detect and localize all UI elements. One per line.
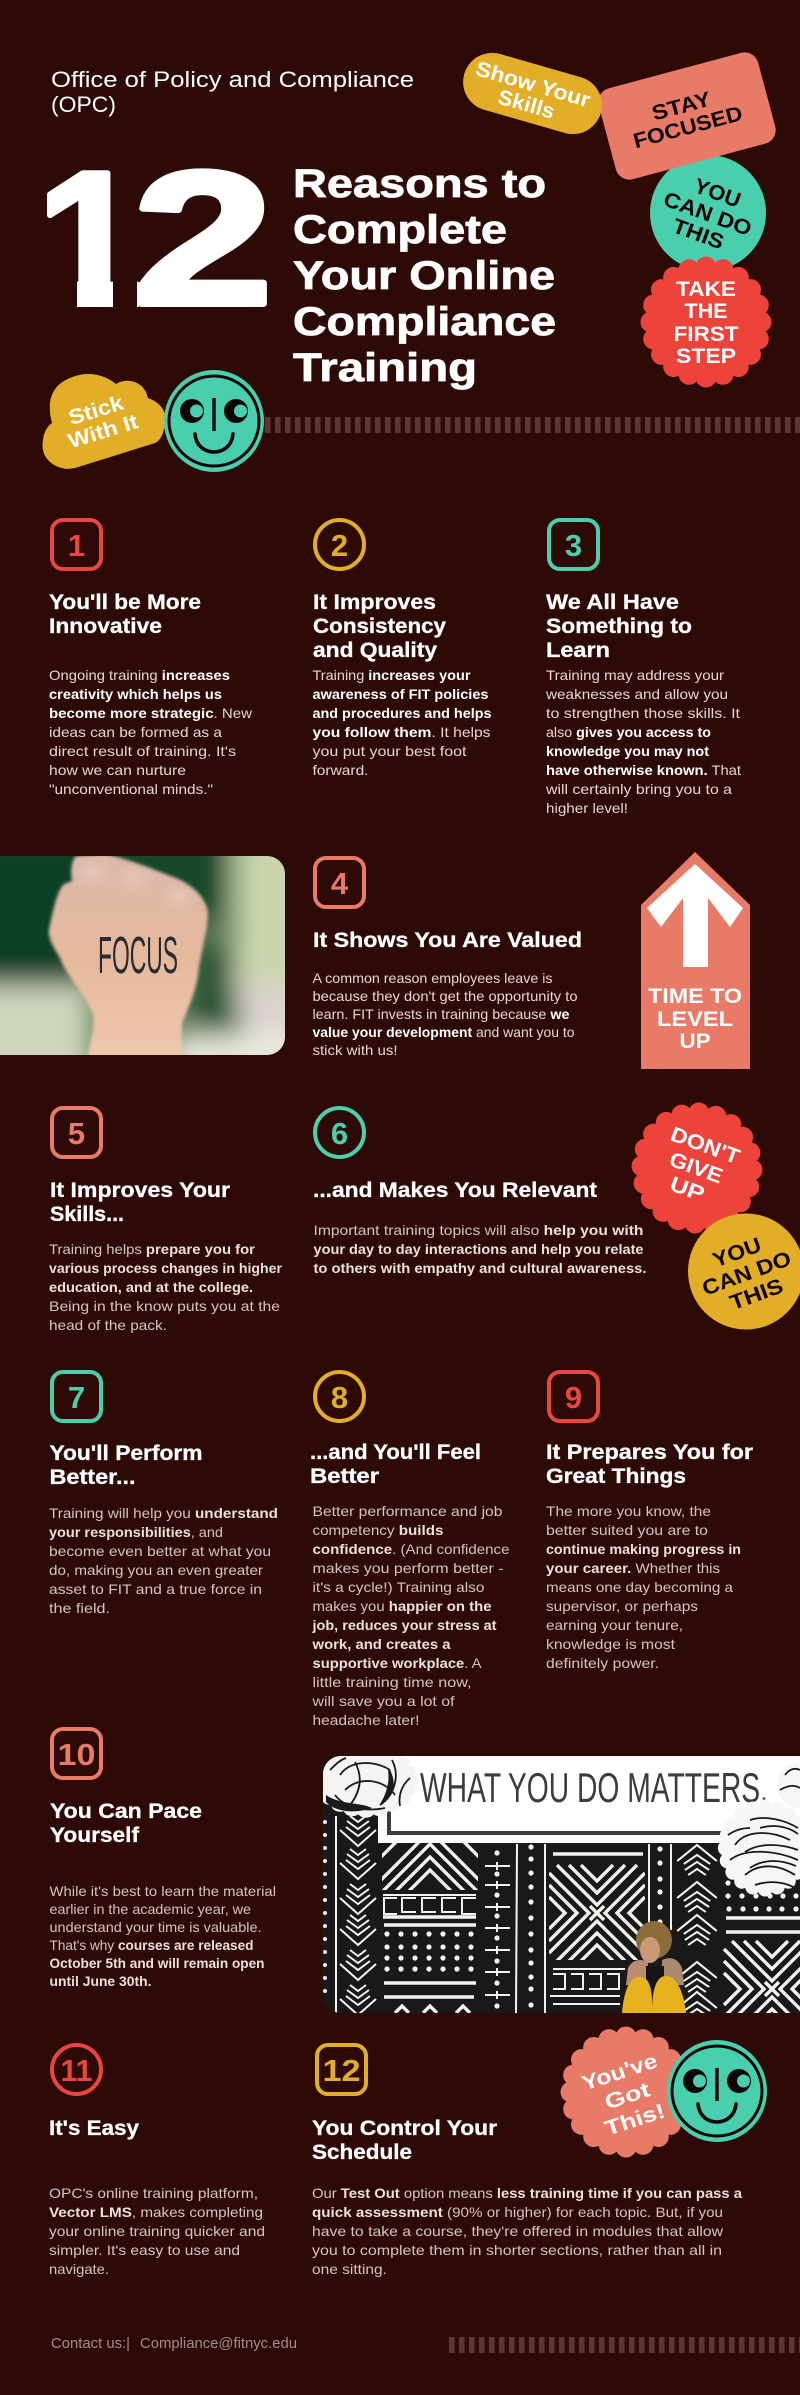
icon: smiley face bottom [667, 2040, 767, 2142]
sticker: stick with it: Stick [66, 391, 127, 430]
reason 4 [312, 858, 582, 1058]
big number 12: 2 [133, 133, 273, 345]
body 2 [312, 667, 492, 778]
reason 11 [49, 2045, 265, 2277]
sticker: show your skills: Show Your [473, 57, 593, 112]
main title: Training [293, 346, 477, 390]
reason 5 [49, 1108, 283, 1333]
reason 2 [312, 520, 492, 778]
number badge 6: 6 [331, 1116, 348, 1151]
body 12: quick assessment (90% or higher) for each topic. But, if you [312, 2204, 723, 2220]
body 7: the field. [49, 1600, 110, 1616]
sticker: you can do this (gold): THIS [727, 1275, 786, 1315]
body 3: weaknesses and allow you [545, 686, 728, 702]
number badge 8 [315, 1372, 364, 1421]
footer contact: Contact us:| [51, 2335, 130, 2352]
body 10: October 5th and will remain open [50, 1955, 264, 1971]
body 7: become even better at what you [49, 1543, 271, 1559]
body 8: it's a cycle!) Training also [312, 1579, 485, 1595]
body 9: better suited you are to [546, 1522, 708, 1538]
number badge 9 [549, 1372, 598, 1421]
body 10: While it's best to learn the material [50, 1883, 276, 1899]
body 3 [545, 667, 741, 816]
heading 3 [546, 591, 692, 662]
sticker: take the first step: TAKE [676, 278, 736, 301]
heading 10: You Can Pace [50, 1800, 202, 1823]
big number 12: 1 [37, 133, 143, 345]
divider stripes: header [265, 417, 800, 433]
body 7: asset to FIT and a true force in [49, 1581, 262, 1597]
body 5: head of the pack. [49, 1317, 167, 1333]
sticker: you've got this: Got [602, 2078, 653, 2114]
body 2: awareness of FIT policies [312, 686, 489, 702]
body 3: have otherwise known. That [546, 762, 741, 778]
body 8 [311, 1503, 510, 1728]
sticker: take the first step: FIRST [674, 323, 739, 346]
sticker: you've got this: You've [579, 2050, 660, 2095]
body 11: Vector LMS , makes completing [49, 2204, 263, 2220]
heading 5: Skills... [50, 1203, 124, 1226]
body 1: Ongoing training increases [49, 667, 230, 683]
body 12 [312, 2185, 742, 2277]
number badge 12 [317, 2045, 366, 2094]
body 9: earning your tenure, [546, 1617, 683, 1633]
body 4: because they don't get the opportunity to [312, 988, 578, 1004]
number badge 2 [315, 520, 364, 569]
sticker: don't give up [613, 1084, 781, 1252]
icon: smiley face top [164, 370, 264, 472]
heading 3: Learn [546, 639, 610, 662]
number badge 6 [315, 1108, 364, 1157]
reason 8 [310, 1372, 510, 1728]
body 10: earlier in the academic year, we [50, 1901, 251, 1917]
heading 12: You Control Your [312, 2117, 497, 2140]
body 11 [49, 2185, 265, 2277]
body 5: various process changes in higher [49, 1260, 283, 1276]
sticker: you've got this: This! [602, 2100, 668, 2141]
body 8: work, and creates a [311, 1636, 451, 1652]
body 12: Our Test Out option means less training time if you can pass a [312, 2185, 742, 2201]
body 2: forward. [312, 762, 368, 778]
icon: white up arrow [647, 864, 743, 967]
sticker: take the first step [640, 256, 772, 388]
sticker: don't give up: GIVE [666, 1148, 726, 1188]
mural banner [378, 1756, 800, 1843]
heading 10: Yourself [50, 1824, 140, 1847]
body 8: Better performance and job [312, 1503, 503, 1519]
organisation name: Office of Policy and Compliance [51, 67, 414, 92]
body 7: Training will help you understand [49, 1505, 278, 1521]
main title: Complete [293, 208, 507, 252]
heading 10 [50, 1800, 202, 1847]
sticker: you can do this (green): THIS [669, 215, 727, 254]
photo: focus tattoo on fist: FOCUS [98, 927, 178, 985]
body 6: Important training topics will also help you with [314, 1222, 644, 1238]
main title [293, 162, 556, 390]
body 8: supportive workplace . A [312, 1655, 482, 1671]
body 3: also gives you access to [546, 724, 711, 740]
number badge 3: 3 [565, 528, 582, 563]
body 9: your career. Whether this [546, 1560, 720, 1576]
sticker: show your skills [456, 46, 609, 141]
body 5 [49, 1241, 283, 1333]
heading 5 [50, 1179, 230, 1226]
heading 7: You'll Perform [50, 1442, 202, 1465]
sticker: take the first step: THE [684, 300, 728, 323]
body 1: how we can nurture [49, 762, 186, 778]
photo: focus tattoo on fist [0, 856, 285, 1055]
body 8: makes you perform better - [312, 1560, 504, 1576]
sticker: you can do this (green) [650, 155, 766, 271]
heading 4: It Shows You Are Valued [313, 929, 582, 952]
body 11: navigate. [49, 2261, 109, 2277]
sticker: you can do this (green): CAN DO [660, 188, 755, 241]
body 5: education, and at the college. [49, 1279, 253, 1295]
heading 3: Something to [546, 615, 692, 638]
body 11: your online training quicker and [49, 2223, 265, 2239]
body 9 [546, 1503, 741, 1671]
heading 12: Schedule [312, 2141, 412, 2164]
body 7: do, making you an even greater [49, 1562, 263, 1578]
body 2: Training increases your [312, 667, 471, 683]
reason 10 [50, 1729, 276, 1989]
body 10: understand your time is valuable. [50, 1919, 262, 1935]
main title: Reasons to [293, 162, 546, 206]
number badge 3 [549, 520, 598, 569]
sticker: stick with it [42, 374, 166, 469]
body 2: you follow them . It helps [312, 724, 491, 740]
body 1 [49, 667, 253, 797]
reason 7 [49, 1372, 278, 1616]
body 4: stick with us! [312, 1042, 398, 1058]
body 12: have to take a course, they're offered in modules that allow [312, 2223, 724, 2239]
sticker: take the first step: STEP [676, 345, 736, 368]
body 1: creativity which helps us [49, 686, 222, 702]
number badge 9: 9 [565, 1380, 582, 1415]
body 3: higher level! [546, 800, 628, 816]
heading 7: Better... [50, 1466, 136, 1489]
heading 6: ...and Makes You Relevant [313, 1179, 597, 1202]
body 9: continue making progress in [546, 1541, 741, 1557]
arrow caption: UP [680, 1030, 710, 1053]
body 10: until June 30th. [50, 1973, 152, 1989]
body 1: direct result of training. It's [49, 743, 236, 759]
body 8: confidence . (And confidence [312, 1541, 510, 1557]
number badge 5 [52, 1108, 101, 1157]
heading 1: You'll be More [49, 591, 201, 614]
body 12: one sitting. [312, 2261, 387, 2277]
number badge 2: 2 [331, 528, 348, 563]
body 1: become more strategic . New [49, 705, 253, 721]
sticker: stick with it: With It [65, 410, 141, 453]
sticker: you can do this (gold) [688, 1214, 800, 1330]
woman sitting in yellow trousers [622, 1921, 686, 2013]
body 8: will save you a lot of [311, 1693, 455, 1709]
photo: what you do matters mural [323, 1756, 800, 2013]
body 8: competency builds [312, 1522, 444, 1538]
number badge 10: 10 [58, 1737, 96, 1772]
heading 8: ...and You'll Feel [310, 1441, 481, 1464]
body 3: knowledge you may not [546, 743, 709, 759]
organisation name [51, 67, 414, 117]
body 8: headache later! [312, 1712, 420, 1728]
heading 8 [310, 1441, 481, 1488]
flower left [323, 1756, 418, 1818]
main title: Your Online [293, 254, 555, 298]
reason 12 [312, 2045, 742, 2277]
sticker: don't give up: DON'T [667, 1123, 743, 1169]
reason 9 [546, 1372, 753, 1671]
body 4: learn. FIT invests in training because we [312, 1006, 570, 1022]
sticker: stay focused: FOCUSED [631, 102, 745, 153]
heading 9 [546, 1441, 753, 1488]
heading 11: It's Easy [49, 2117, 139, 2140]
arrow caption [648, 985, 742, 1053]
reason 1 [49, 520, 253, 797]
body 10 [50, 1883, 276, 1989]
body 8: little training time now, [312, 1674, 472, 1690]
body 8: makes you happier on the [312, 1598, 492, 1614]
big number 12 [25, 133, 273, 345]
body 4: value your development and want you to [312, 1024, 575, 1040]
body 7 [49, 1505, 278, 1616]
body 2: you put your best foot [312, 743, 467, 759]
sticker: stay focused [595, 49, 779, 183]
heading 2: Consistency [313, 615, 446, 638]
sticker: you can do this (green): YOU [691, 174, 744, 212]
arrow caption: TIME TO [648, 985, 742, 1008]
body 9: means one day becoming a [546, 1579, 733, 1595]
body 4: A common reason employees leave is [312, 970, 552, 986]
heading 9: It Prepares You for [546, 1441, 753, 1464]
sticker: you can do this (gold): YOU [710, 1234, 765, 1272]
reason 3 [545, 520, 741, 816]
number badge 11: 11 [60, 2053, 92, 2088]
body 3: Training may address your [546, 667, 724, 683]
body 3: will certainly bring you to a [545, 781, 732, 797]
sticker: show your skills: Skills [495, 86, 557, 124]
body 12: you to complete them in shorter sections, rather than all in [312, 2242, 722, 2258]
footer contact [51, 2335, 297, 2352]
heading 2: It Improves [313, 591, 436, 614]
divider stripes: footer [449, 2337, 800, 2353]
body 8: job, reduces your stress at [311, 1617, 497, 1633]
number badge 12: 12 [322, 2053, 360, 2088]
heading 1: Innovative [49, 615, 162, 638]
body 5: Being in the know puts you at the [49, 1298, 280, 1314]
body 6: your day to day interactions and help you relate [314, 1241, 644, 1257]
body 5: Training helps prepare you for [49, 1241, 256, 1257]
flower right [718, 1761, 800, 1896]
heading 5: It Improves Your [50, 1179, 230, 1202]
body 3: to strengthen those skills. It [546, 705, 740, 721]
body 1: "unconventional minds." [49, 781, 213, 797]
body 11: simpler. It's easy to use and [49, 2242, 240, 2258]
sticker: don't give up: UP [667, 1173, 707, 1206]
footer contact: Compliance@fitnyc.edu [140, 2335, 297, 2352]
number badge 11 [52, 2045, 101, 2094]
heading 8: Better [310, 1465, 379, 1488]
number badge 4 [315, 858, 364, 907]
number badge 4: 4 [331, 866, 349, 901]
body 1: ideas can be formed as a [49, 724, 222, 740]
sticker: stay focused: STAY [649, 88, 713, 126]
heading 2 [313, 591, 446, 662]
body 7: your responsibilities , and [49, 1524, 223, 1540]
number badge 5: 5 [68, 1116, 85, 1151]
heading 12 [312, 2117, 497, 2164]
body 9: supervisor, or perhaps [546, 1598, 698, 1614]
heading 2: and Quality [313, 639, 437, 662]
heading 7 [50, 1442, 202, 1489]
body 9: The more you know, the [546, 1503, 711, 1519]
heading 3: We All Have [546, 591, 679, 614]
main title: Compliance [293, 300, 556, 344]
body 2: and procedures and helps [312, 705, 492, 721]
reason 6 [313, 1108, 646, 1276]
sticker: time to level up arrow [641, 852, 750, 1069]
number badge 7 [52, 1372, 101, 1421]
heading 1 [49, 591, 201, 638]
sticker: you've got this [543, 2009, 709, 2175]
body 6 [314, 1222, 646, 1276]
number badge 1 [52, 520, 101, 569]
number badge 1: 1 [68, 528, 85, 563]
number badge 8: 8 [331, 1380, 348, 1415]
sticker: you can do this (gold): CAN DO [699, 1247, 794, 1301]
body 10: That's why courses are released [50, 1937, 254, 1953]
arrow caption: LEVEL [657, 1008, 733, 1031]
body 9: knowledge is most [546, 1636, 675, 1652]
number badge 10 [52, 1729, 101, 1778]
organisation name: (OPC) [51, 92, 116, 117]
heading 9: Great Things [546, 1465, 686, 1488]
body 4 [312, 970, 578, 1058]
body 6: to others with empathy and cultural awareness. [314, 1260, 646, 1276]
number badge 7: 7 [68, 1380, 85, 1415]
body 11: OPC's online training platform, [49, 2185, 258, 2201]
body 9: definitely power. [546, 1655, 659, 1671]
